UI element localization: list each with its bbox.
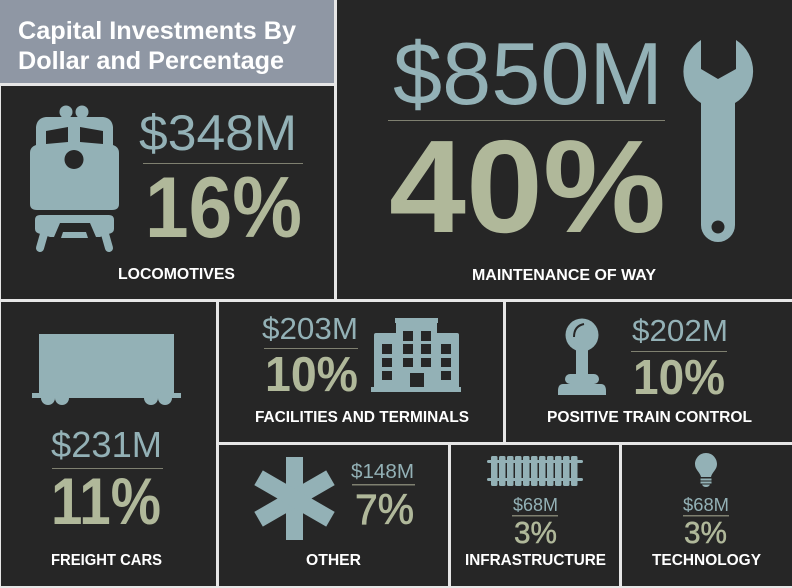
label: FACILITIES AND TERMINALS <box>255 409 469 426</box>
panel: freight cars <box>1 302 216 586</box>
icon: joystick <box>558 318 606 395</box>
percent: 40% <box>389 113 666 260</box>
percent: 10% <box>633 351 725 405</box>
icon: railroad track <box>487 456 583 486</box>
panel: title <box>0 0 334 83</box>
icon: locomotive <box>30 106 119 248</box>
label: OTHER <box>306 552 361 569</box>
amount: $348M <box>139 105 297 161</box>
percent: 10% <box>265 348 358 402</box>
panel: technology <box>622 445 792 586</box>
panel: infrastructure <box>451 445 619 586</box>
amount: $203M <box>262 311 358 346</box>
percent: 3% <box>514 515 557 550</box>
icon: light bulb <box>695 453 717 487</box>
percent: 11% <box>51 464 161 538</box>
amount: $202M <box>632 313 728 348</box>
amount: $850M <box>393 24 663 123</box>
amount: $231M <box>51 424 162 465</box>
label: LOCOMOTIVES <box>118 266 235 283</box>
label: FREIGHT CARS <box>51 552 162 569</box>
title: Dollar and Percentage <box>18 47 284 75</box>
title: Capital Investments By <box>18 17 296 45</box>
label: TECHNOLOGY <box>652 552 761 569</box>
amount: $68M <box>683 495 729 515</box>
panel: maintenance of way <box>337 0 792 299</box>
icon: wrench <box>683 40 753 242</box>
panel: positive train control <box>506 302 792 442</box>
panel: facilities and terminals <box>219 302 503 442</box>
percent: 7% <box>355 486 414 534</box>
percent: 16% <box>145 160 302 256</box>
amount: $148M <box>351 461 414 483</box>
panel: locomotives <box>1 86 334 299</box>
percent: 3% <box>684 515 727 550</box>
label: INFRASTRUCTURE <box>465 552 606 569</box>
label: MAINTENANCE OF WAY <box>472 267 656 284</box>
icon: asterisk <box>254 457 335 540</box>
panel: other <box>219 445 448 586</box>
icon: freight car <box>32 334 181 405</box>
amount: $68M <box>513 495 558 515</box>
label: POSITIVE TRAIN CONTROL <box>547 409 752 426</box>
icon: building <box>371 318 461 392</box>
